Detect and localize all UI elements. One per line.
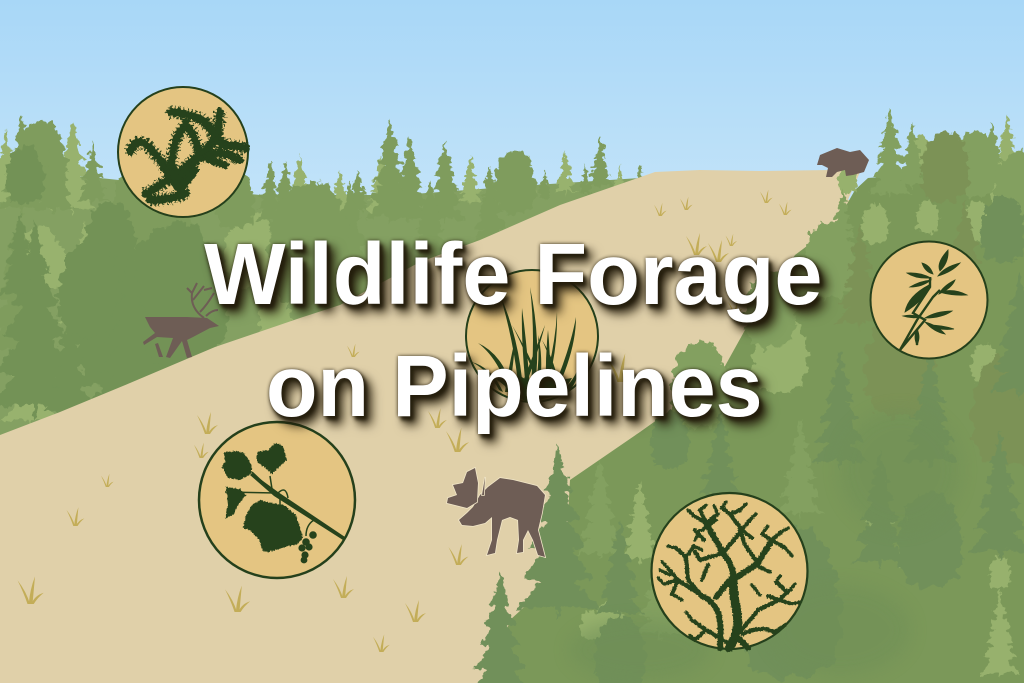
right forest: [469, 108, 1024, 683]
grass blades: [472, 287, 580, 402]
left tree row, mid: [0, 115, 645, 360]
caribou silhouette: [143, 283, 219, 358]
title line 2: on Pipelines: [266, 338, 763, 435]
soft painted shading: [570, 410, 960, 680]
vine stem and leaves: [222, 443, 345, 563]
moss fronds: [130, 112, 246, 200]
circle: vine: [199, 422, 355, 578]
title line 1: Wildlife Forage: [204, 226, 822, 323]
pipeline right-of-way clearing: [0, 170, 860, 683]
bear silhouette: [817, 148, 869, 177]
forage grass tufts: [18, 190, 792, 652]
willow leaves and stems: [900, 250, 967, 350]
left forest base: [0, 172, 665, 450]
sky: [0, 0, 1024, 200]
circle: willow shoot: [870, 242, 988, 358]
right tree row, dark: [469, 195, 1024, 683]
circle: lichen: [652, 493, 808, 649]
left tree row, light: [0, 120, 627, 430]
left tree row, dark: [0, 145, 229, 440]
right forest base: [490, 165, 1024, 683]
moose silhouette: [447, 468, 545, 557]
circle: grass: [466, 270, 598, 402]
right tree row, mid: [576, 108, 1024, 640]
right tree row, light: [580, 115, 1022, 680]
lichen branches: [658, 502, 800, 648]
circle: moss: [118, 87, 248, 217]
left forest: [0, 115, 665, 450]
right tree row, olive: [835, 130, 1024, 470]
